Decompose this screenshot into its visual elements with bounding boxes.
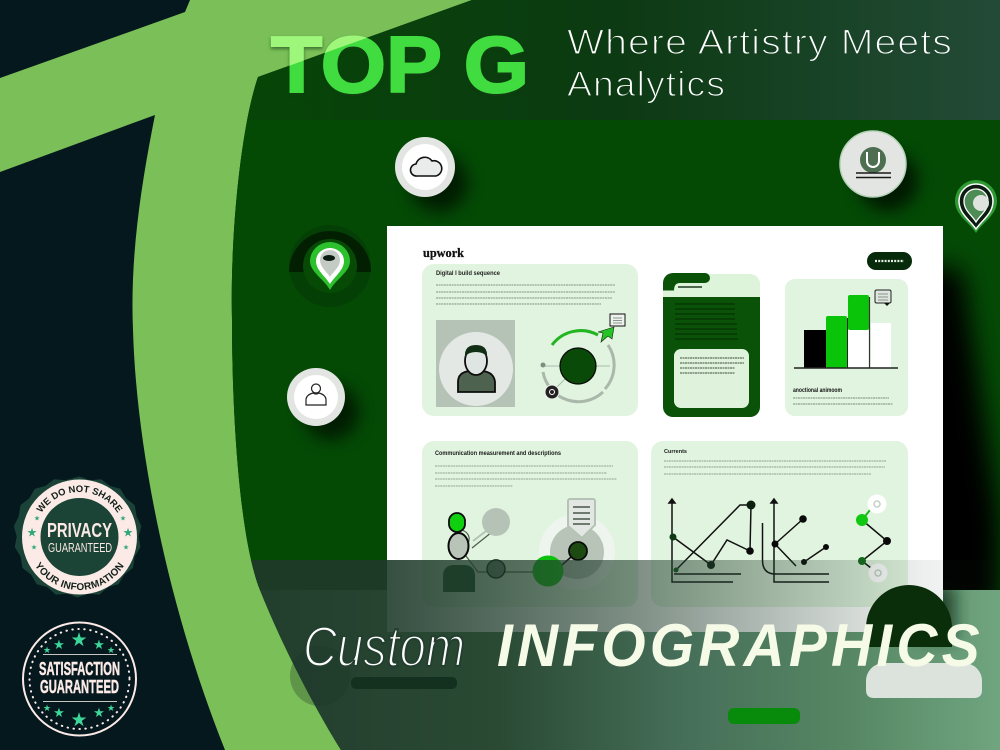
- badge stars: ★: [27, 526, 37, 540]
- translucent bottom band: [251, 560, 943, 632]
- satisfaction stars: ★: [70, 629, 88, 651]
- badge: privacy guaranteed: [14, 476, 142, 598]
- satisfaction stars: ★: [93, 706, 105, 721]
- badge: satisfaction guaranteed: [23, 622, 136, 736]
- profile text lines: [436, 285, 615, 304]
- ring diagram: [540, 314, 625, 402]
- title: TOP G: TOP G: [271, 20, 529, 109]
- badge stars: ★: [123, 526, 133, 540]
- line chart middle: [762, 499, 829, 582]
- badge stars: ★: [31, 544, 37, 552]
- panel: line charts card: [651, 441, 908, 607]
- dark dome: [866, 585, 952, 647]
- faint round button shadow: [290, 646, 350, 706]
- heading: Custom: Custom: [303, 615, 465, 679]
- satisfaction stars: ★: [53, 706, 65, 721]
- chart caption: anoctional animoom: [793, 388, 842, 394]
- satisfaction stars: ★: [93, 638, 105, 653]
- badge: privacy guaranteed: GUARANTEED: [48, 540, 112, 555]
- title: TOP G: [269, 36, 525, 94]
- line chart left: [669, 499, 756, 582]
- tagline: [567, 23, 953, 104]
- satisfaction stars: ★: [70, 709, 88, 731]
- green pill: [728, 708, 800, 724]
- light rounded block: [866, 663, 982, 698]
- tagline: Where Artistry Meets: [567, 23, 953, 62]
- badge stars: [27, 514, 133, 552]
- chart caption lines: [793, 398, 893, 404]
- target with document: [539, 499, 615, 590]
- badge stars: ★: [34, 514, 40, 522]
- satisfaction stars: ★: [107, 646, 115, 656]
- dark green main area: [225, 0, 1000, 750]
- panel: profile and ring: [422, 264, 638, 416]
- icon: right location pin: [955, 180, 997, 233]
- node chain right: [856, 494, 891, 582]
- icon: cloud button: [395, 137, 468, 212]
- satisfaction stars: ★: [53, 638, 65, 653]
- icon: location pin with dome: [289, 225, 371, 307]
- tagline: Analytics: [567, 65, 726, 104]
- charts text lines: [664, 461, 886, 474]
- dark bar: [351, 677, 457, 689]
- satisfaction stars: ★: [43, 646, 51, 656]
- charts heading: Currents: [664, 449, 687, 455]
- badge: satisfaction guaranteed: GUARANTEED: [40, 677, 119, 697]
- icon: user button: [287, 368, 359, 440]
- bar chart: [794, 295, 898, 368]
- badge stars: ★: [120, 514, 126, 522]
- avatar: [436, 320, 515, 407]
- inner note box: [674, 349, 749, 408]
- pill button: [867, 252, 912, 270]
- icon: U badge: [840, 131, 918, 211]
- satisfaction text: SATISFACTION: [39, 659, 120, 679]
- panel: bar chart card: [785, 279, 908, 416]
- title: TOP G: TOP G: [271, 20, 529, 109]
- light green swoosh band: [0, 0, 472, 750]
- satisfaction stars: ★: [107, 704, 115, 714]
- panel: people network card: [422, 441, 638, 607]
- profile heading: Digital I build sequence: [436, 270, 500, 277]
- people nodes: [443, 508, 564, 592]
- badge center text: PRIVACY: [47, 520, 112, 542]
- speech note icon: [875, 290, 891, 306]
- logo: upwork: upwork: [423, 245, 465, 260]
- network text lines: [435, 466, 617, 486]
- panel: dark green text card: [663, 273, 760, 417]
- heading: INFOGRAPHICS: INFOGRAPHICS: [497, 613, 980, 679]
- badge stars: ★: [123, 544, 129, 552]
- network heading: Communication measurement and descriptions: [435, 451, 562, 457]
- satisfaction stars: ★: [43, 704, 51, 714]
- badge arc text top: WE DO NOT SHARE: [36, 485, 123, 513]
- badge arc text bottom: YOUR INFORMATION: [36, 562, 124, 590]
- satisfaction stars: [43, 629, 115, 731]
- infographic sheet panel: [387, 226, 943, 632]
